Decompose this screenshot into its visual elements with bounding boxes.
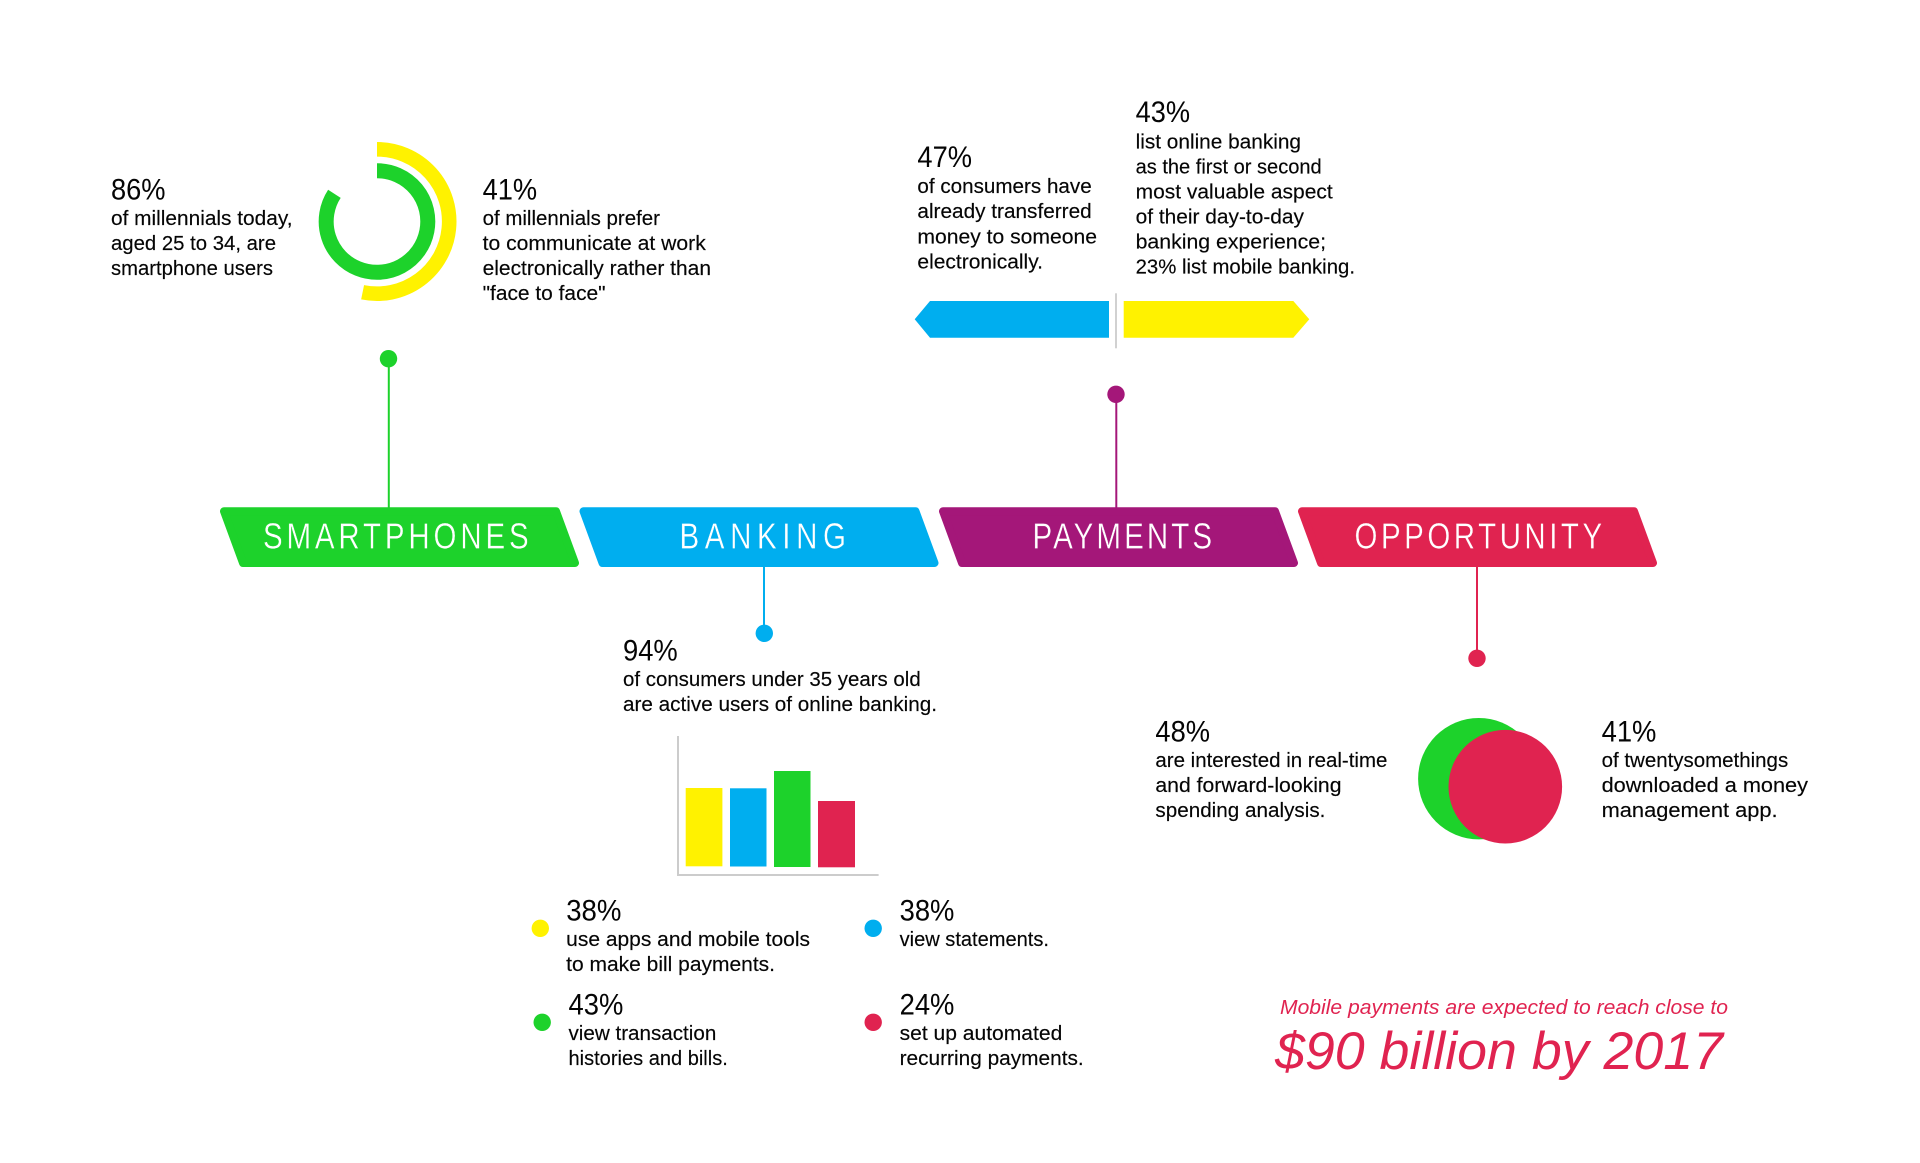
stat: 47% of consumers: money to someone <box>917 226 1097 248</box>
panel: banking <box>532 565 1084 1070</box>
legend item: 38% apps: 38% <box>566 894 621 928</box>
callout: mobile payments forecast <box>1274 996 1728 1081</box>
stat: 94% of consumers: are active users of online banking. <box>623 694 937 716</box>
stat: 48% real-time <box>1155 716 1387 822</box>
stat: 41% twentysomethings <box>1602 716 1809 822</box>
legend item: 43% transaction histories: 43% <box>568 988 623 1021</box>
stat: 41% of millennials <box>483 174 711 305</box>
stat: 94% of consumers: of consumers under 35 years old <box>623 669 921 691</box>
ribbon: opportunity <box>1302 511 1653 563</box>
stat: 43% list online banking <box>1136 96 1355 278</box>
stat: 48% real-time: are interested in real-time <box>1155 750 1387 772</box>
stat: 94% of consumers <box>623 634 937 716</box>
stat: 43% list online banking: most valuable aspect <box>1136 181 1333 203</box>
stat: 43% list online banking: 43% <box>1136 96 1190 129</box>
stat: 41% of millennials: to communicate at work <box>483 233 707 255</box>
chart: overlapping circles <box>1418 718 1562 844</box>
stat: 48% real-time: 48% <box>1155 716 1210 748</box>
stat: 41% twentysomethings: of twentysomethings <box>1602 750 1788 772</box>
legend item: 24% automated: recurring payments. <box>900 1048 1084 1070</box>
stat: 86% of millennials: aged 25 to 34, are <box>111 233 276 255</box>
connector: smartphones <box>380 350 397 510</box>
legend item: 24% automated: 24% <box>900 988 954 1021</box>
stat: 48% real-time: spending analysis. <box>1155 800 1325 822</box>
ribbon: payments <box>943 511 1294 563</box>
stat: 86% of millennials: of millennials today, <box>111 208 292 230</box>
category ribbon <box>224 511 1653 563</box>
legend item: 38% apps: to make bill payments. <box>566 954 775 976</box>
legend item: 24% automated <box>864 988 1084 1070</box>
stat: 47% of consumers: already transferred <box>917 201 1092 223</box>
stat: 86% of millennials <box>111 174 292 280</box>
stat: 41% twentysomethings: management app. <box>1602 800 1778 822</box>
arrow: blue left <box>915 301 1109 338</box>
stat: 43% list online banking: banking experience; <box>1136 231 1326 253</box>
ribbon: smartphones <box>224 511 575 563</box>
legend item: 38% statements: view statements. <box>900 929 1049 951</box>
divider between arrows <box>1115 293 1117 348</box>
stat: 41% twentysomethings: downloaded a money <box>1602 775 1809 797</box>
connector: payments <box>1107 386 1125 510</box>
legend item: 43% transaction histories <box>534 988 728 1070</box>
callout: mobile payments forecast: $90 billion by 2017 <box>1274 1022 1726 1081</box>
chart: concentric rings <box>326 149 449 294</box>
stat: 86% of millennials: smartphone users <box>111 258 273 280</box>
panel: payments <box>915 96 1355 510</box>
stat: 41% of millennials: "face to face" <box>483 283 606 305</box>
legend item: 38% apps <box>532 894 810 976</box>
legend item: 43% transaction histories: view transaction <box>568 1023 716 1045</box>
legend item: 38% statements <box>864 894 1049 951</box>
legend item: 38% apps: use apps and mobile tools <box>566 929 810 951</box>
stat: 48% real-time: and forward-looking <box>1155 775 1342 797</box>
stat: 47% of consumers <box>917 141 1097 273</box>
stat: 43% list online banking: list online banking <box>1136 131 1301 153</box>
stat: 43% list online banking: 23% list mobile banking. <box>1136 256 1355 278</box>
stat: 43% list online banking: as the first or second <box>1136 156 1322 178</box>
stat: 41% of millennials: electronically rather than <box>483 258 711 280</box>
connector: opportunity <box>1468 565 1486 667</box>
callout: mobile payments forecast: Mobile payments are expected to reach close to <box>1280 996 1728 1019</box>
legend item: 43% transaction histories: histories and bills. <box>568 1048 728 1070</box>
bar chart <box>678 736 879 875</box>
stat: 47% of consumers: electronically. <box>917 251 1043 273</box>
stat: 94% of consumers: 94% <box>623 634 678 668</box>
ribbon: banking: BANKING <box>680 516 846 556</box>
legend item: 24% automated: set up automated <box>900 1023 1062 1045</box>
stat: 43% list online banking: of their day-to-day <box>1136 206 1305 228</box>
panel: smartphones <box>111 149 711 510</box>
ribbon: banking <box>584 511 934 563</box>
legend item: 38% statements: 38% <box>900 894 954 928</box>
stat: 41% twentysomethings: 41% <box>1602 716 1656 748</box>
ribbon: payments: PAYMENTS <box>1032 516 1212 556</box>
stat: 47% of consumers: 47% <box>917 141 972 174</box>
ribbon: smartphones: SMARTPHONES <box>263 516 529 556</box>
stat: 47% of consumers: of consumers have <box>917 176 1092 198</box>
panel: opportunity <box>1155 565 1809 1081</box>
arrow: yellow right <box>1124 301 1309 338</box>
connector: banking <box>756 565 773 642</box>
stat: 41% of millennials: 41% <box>483 174 537 206</box>
ribbon: opportunity: OPPORTUNITY <box>1354 516 1602 556</box>
stat: 41% of millennials: of millennials prefer <box>483 208 660 230</box>
stat: 86% of millennials: 86% <box>111 174 166 206</box>
